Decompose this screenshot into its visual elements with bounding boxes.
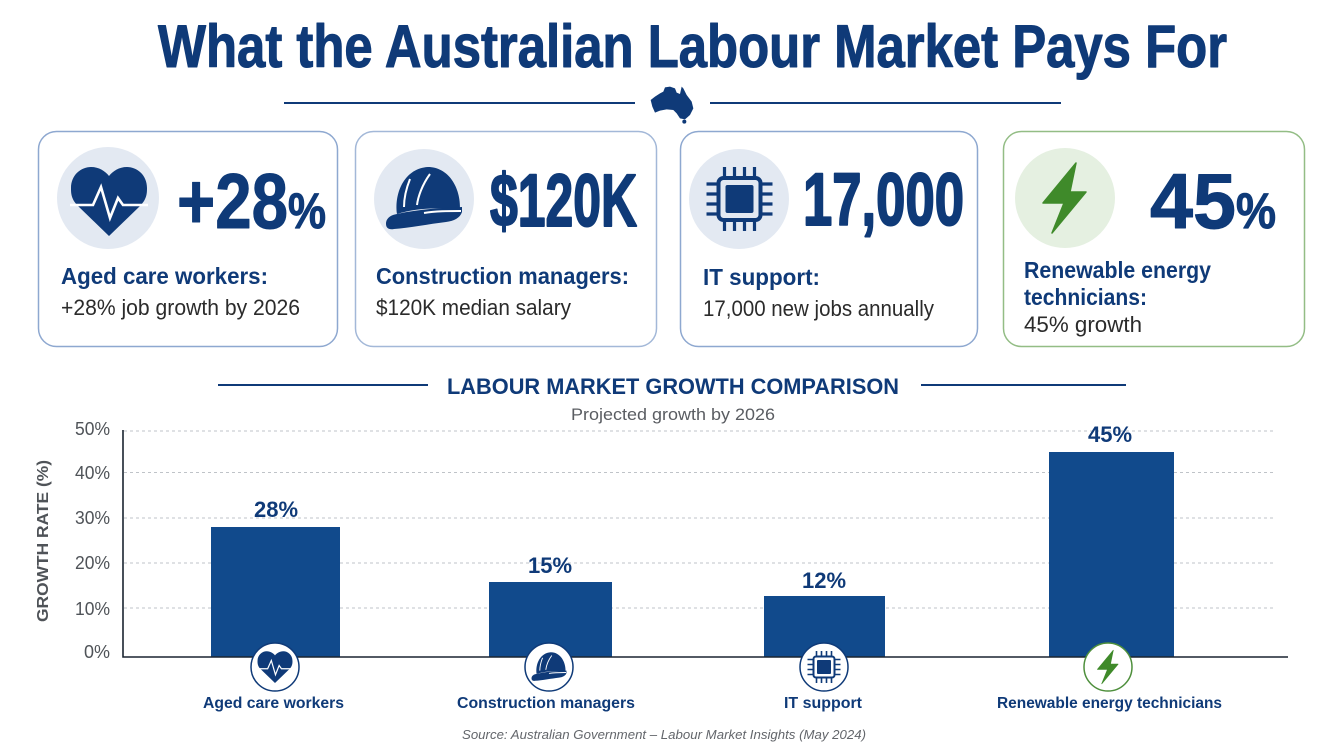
stat: 17,000: 17,000 xyxy=(803,158,964,241)
y-axis labels: 40% xyxy=(75,463,110,483)
category: IT support: IT support xyxy=(784,695,863,712)
panel: renewable energy technicians xyxy=(1004,132,1304,346)
label: IT support: IT support: xyxy=(703,264,820,290)
icon: lightning bolt xyxy=(1043,163,1086,233)
category: construction managers: Construction managers xyxy=(457,695,635,712)
bar chart xyxy=(35,419,1288,712)
bar: aged care workers 28%: 28% xyxy=(254,497,298,522)
panel: construction managers xyxy=(356,132,656,346)
category: construction managers xyxy=(457,643,635,712)
stat: 45%: % xyxy=(1236,183,1276,239)
label: renewable energy technicians: Renewable energy xyxy=(1024,257,1211,283)
y-axis labels: 0% xyxy=(84,642,110,662)
y-axis labels: 20% xyxy=(75,553,110,573)
icon: microchip xyxy=(706,167,772,231)
chart subtitle: Projected growth by 2026 xyxy=(571,405,775,424)
icon: Australia map xyxy=(651,87,693,124)
y-axis labels: 30% xyxy=(75,508,110,528)
category: aged care workers: Aged care workers xyxy=(203,695,344,712)
y-axis labels xyxy=(75,419,110,662)
category: renewable energy technicians: Renewable energy technicians xyxy=(997,695,1222,712)
bar: aged care workers 28% xyxy=(211,497,340,657)
bar: IT support 12%: 12% xyxy=(802,568,846,593)
stat: +28%: % xyxy=(288,183,326,239)
source note: Source: Australian Government – Labour Market Insights (May 2024) xyxy=(462,727,866,742)
bar: IT support 12% xyxy=(764,568,885,657)
panel: aged care workers xyxy=(38,132,338,346)
y-axis labels: 10% xyxy=(75,599,110,619)
detail: aged care workers: +28% job growth by 2026 xyxy=(61,295,300,320)
y-axis title: GROWTH RATE (%) xyxy=(35,460,52,622)
title divider with Australia map xyxy=(284,87,1061,124)
bar: construction managers 15% xyxy=(489,553,612,657)
panel: IT support xyxy=(680,132,978,346)
icon: heart xyxy=(70,167,148,236)
y-axis labels: 50% xyxy=(75,419,110,439)
detail: renewable energy technicians: 45% growth xyxy=(1024,312,1142,337)
detail: construction managers: $120K median salary xyxy=(376,295,571,320)
icon: hard hat xyxy=(386,167,462,229)
category: renewable energy technicians xyxy=(997,643,1222,712)
label: construction managers: Construction managers: xyxy=(376,263,629,289)
label: aged care workers: Aged care workers: xyxy=(61,263,268,289)
category: IT support xyxy=(784,643,863,712)
category: aged care workers xyxy=(203,643,344,712)
chart heading: LABOUR MARKET GROWTH COMPARISON xyxy=(447,374,899,399)
stat: 45%: 45 xyxy=(1150,157,1236,245)
stat: $120K: $120K xyxy=(490,159,637,242)
bar: construction managers 15%: 15% xyxy=(528,553,572,578)
label: renewable energy technicians: technicians: xyxy=(1024,284,1147,310)
detail: IT support: 17,000 new jobs annually xyxy=(703,296,934,321)
stat: +28%: +28 xyxy=(177,157,288,245)
bar: renewable energy technicians 45% xyxy=(1049,422,1174,657)
bar: renewable energy technicians 45%: 45% xyxy=(1088,422,1132,447)
